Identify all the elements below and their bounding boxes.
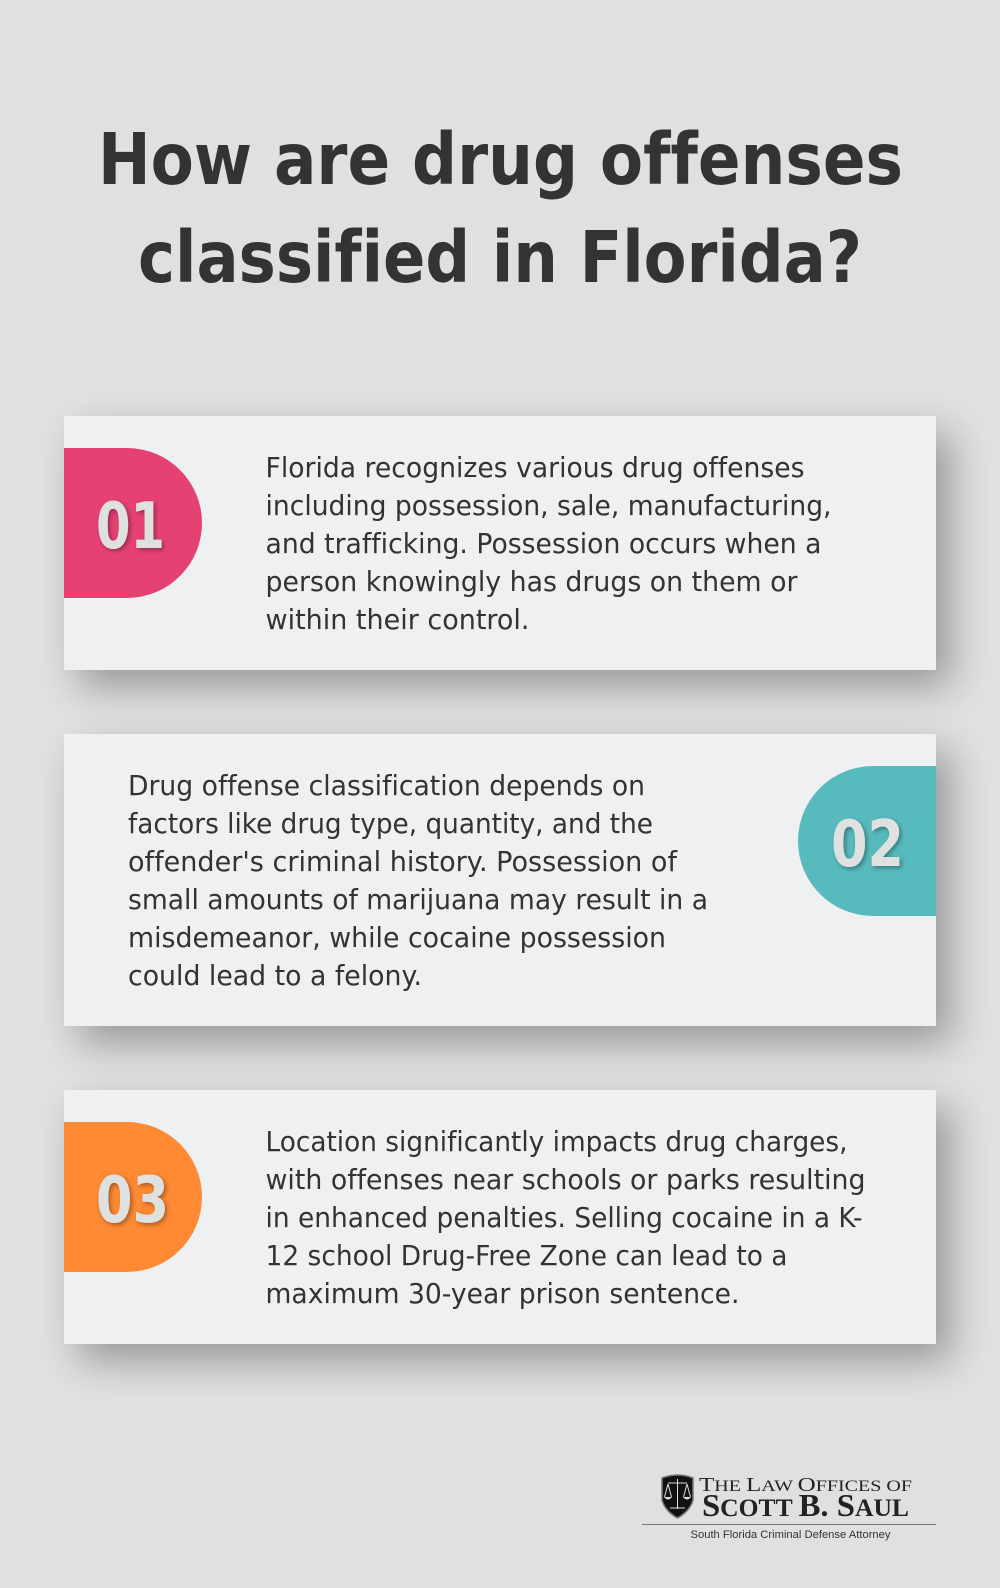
text block: card 2: Drug offense classification depends on — [128, 770, 645, 802]
panel: card 2 — [64, 734, 951, 1043]
text block: card 3: 12 school Drug-Free Zone can lead to a — [266, 1240, 788, 1272]
text block: card 3: Location significantly impacts drug charges, — [266, 1126, 848, 1158]
badge: 03: 03 — [96, 1164, 169, 1238]
panel: card 3 — [64, 1090, 951, 1361]
logo text: the law offices of: THE LAW OFFICES OF — [699, 1474, 912, 1496]
logo tagline: South Florida Criminal Defense Attorney — [690, 1529, 891, 1541]
title: classified in Florida? — [138, 216, 862, 299]
text block: card 2: misdemeanor, while cocaine possession — [128, 922, 666, 954]
text block: card 2: offender's criminal history. Possession of — [128, 846, 678, 878]
logo text: scott b. saul: SCOTT B. SAUL — [702, 1487, 909, 1523]
badge: 01: 01 — [96, 490, 165, 564]
text block: card 2: factors like drug type, quantity, and the — [128, 808, 653, 840]
text block: card 3 — [266, 1126, 866, 1310]
badge: 02 — [798, 766, 936, 916]
text block: card 1: including possession, sale, manufacturing, — [266, 490, 832, 522]
text block: card 3: maximum 30-year prison sentence. — [266, 1278, 740, 1310]
icon: shield with scales — [662, 1475, 693, 1518]
text block: card 3: in enhanced penalties. Selling cocaine in a K- — [266, 1202, 862, 1234]
text block: card 1: within their control. — [266, 604, 530, 636]
badge: 02: 02 — [831, 808, 904, 882]
text block: card 2: small amounts of marijuana may result in a — [128, 884, 708, 916]
text block: card 1: Florida recognizes various drug offenses — [266, 452, 804, 484]
badge: 03 — [64, 1122, 202, 1272]
title: How are drug offenses — [98, 118, 903, 201]
panel: card 1 — [64, 416, 951, 687]
logo — [642, 1474, 936, 1541]
text block: card 1 — [266, 452, 832, 636]
text block: card 1: and trafficking. Possession occurs when a — [266, 528, 822, 560]
text block: card 2 — [128, 770, 708, 992]
text block: card 3: with offenses near schools or parks resulting — [266, 1164, 866, 1196]
badge: 01 — [64, 448, 202, 598]
text block: card 1: person knowingly has drugs on them or — [266, 566, 798, 598]
text block: card 2: could lead to a felony. — [128, 960, 422, 992]
title — [98, 118, 903, 299]
